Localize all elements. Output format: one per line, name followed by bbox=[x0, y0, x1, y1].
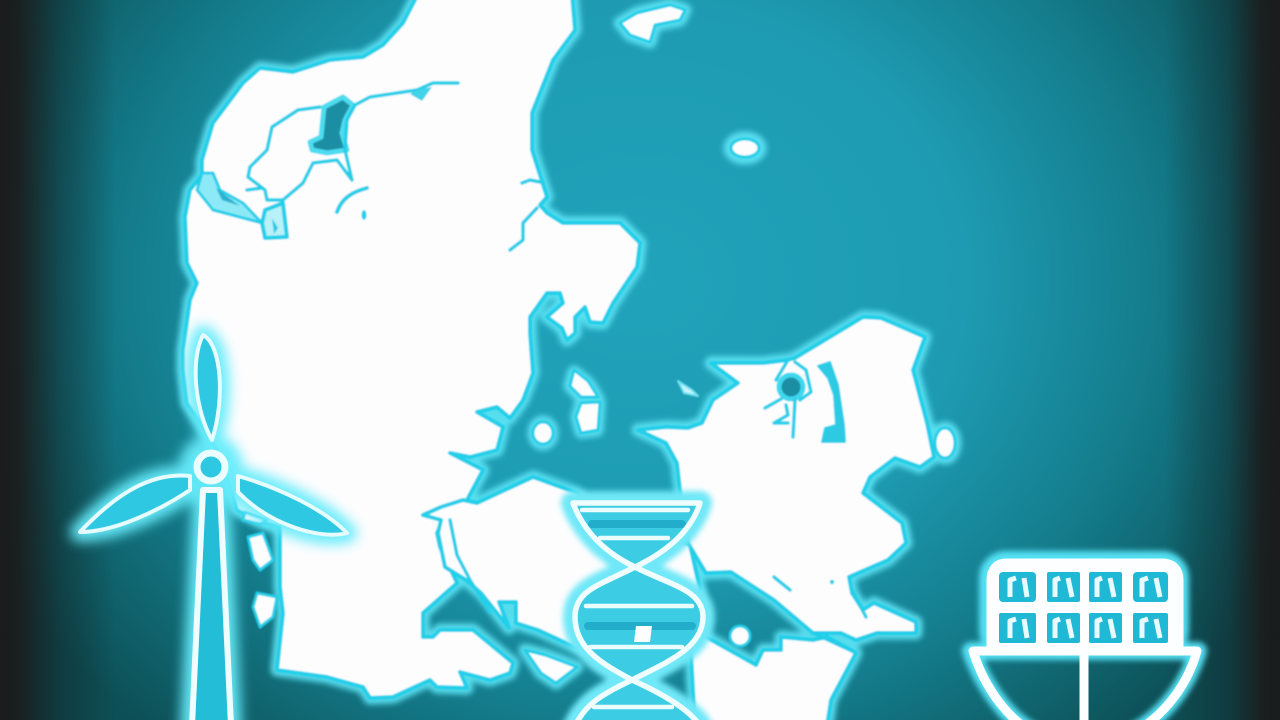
helix coastline fragment bbox=[634, 626, 652, 642]
ship hull bbox=[973, 651, 1197, 720]
turbine hub bbox=[197, 453, 225, 481]
icon: solar panel ship bbox=[971, 560, 1198, 720]
southern Jutland channels bbox=[450, 520, 490, 612]
turbine glow bbox=[80, 335, 347, 720]
icon: DNA double helix bbox=[573, 503, 703, 720]
turbine tower bbox=[192, 490, 231, 720]
ship glow bbox=[971, 560, 1198, 720]
helix rungs bbox=[582, 510, 692, 707]
helix body bbox=[573, 503, 703, 720]
turbine blades bbox=[80, 335, 347, 535]
small islands bbox=[243, 5, 955, 683]
helix halo bbox=[573, 503, 703, 720]
map of Denmark bbox=[183, 0, 955, 720]
solar panel frame bbox=[988, 560, 1182, 650]
helix strands bbox=[573, 503, 703, 720]
solar cells bbox=[999, 572, 1168, 643]
Zealand island bbox=[638, 317, 934, 640]
Jutland peninsula bbox=[183, 0, 640, 698]
coastal glow bbox=[183, 0, 955, 720]
solar cell highlights bbox=[1010, 578, 1160, 638]
Funen island bbox=[423, 477, 700, 647]
Limfjord waters bbox=[197, 83, 540, 250]
Zealand fjords bbox=[730, 360, 866, 650]
Lolland and Falster bbox=[690, 635, 856, 720]
icon: wind turbine bbox=[80, 335, 347, 720]
